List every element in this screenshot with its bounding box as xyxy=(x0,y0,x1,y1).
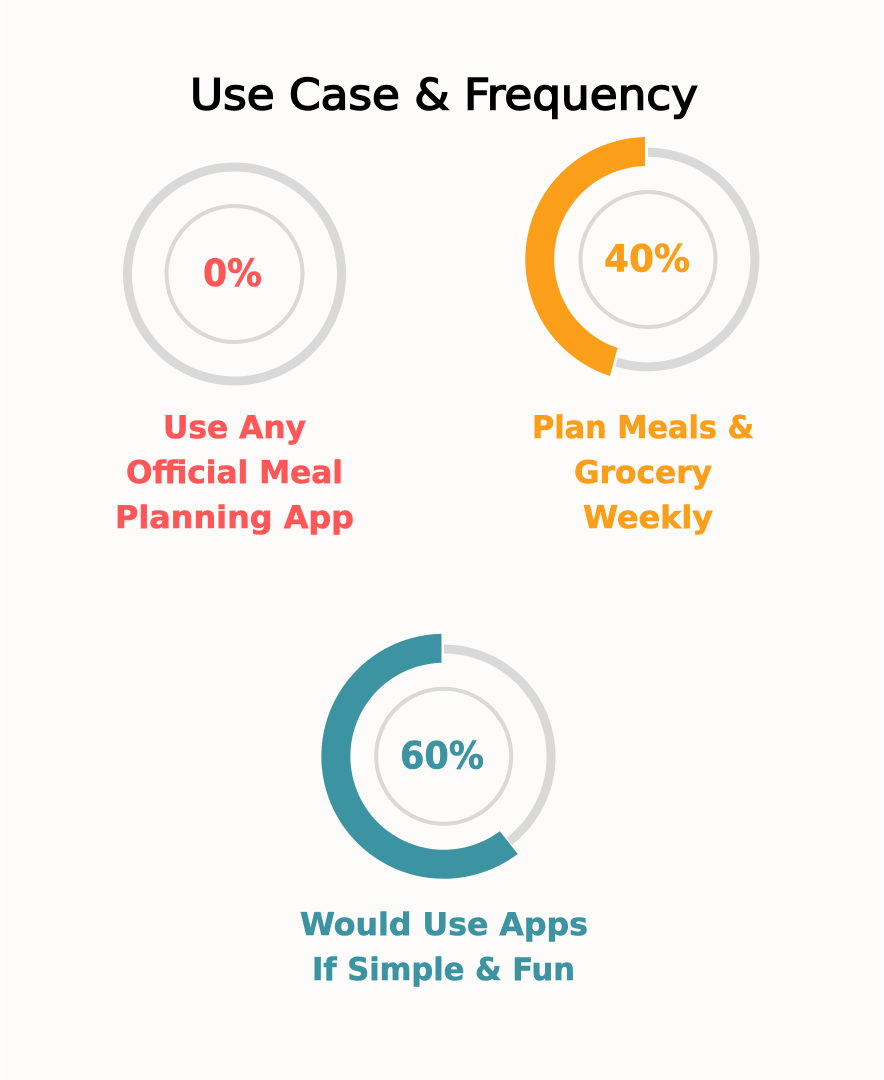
donut chart: 0% xyxy=(128,167,342,381)
label: would use apps if simple and fun: Would Use Apps xyxy=(300,907,588,943)
label: use any official meal planning app: Planning App xyxy=(115,500,354,536)
value: 0%: 0% xyxy=(203,252,262,295)
donut chart: 60% xyxy=(321,634,551,879)
label: use any official meal planning app: Official Meal xyxy=(126,455,343,491)
label: would use apps if simple and fun: If Simple & Fun xyxy=(312,952,575,988)
panel: would use apps if simple and fun, 60% xyxy=(300,634,588,988)
panel: use any official app, 0% xyxy=(115,167,354,536)
label: use any official meal planning app: Use Any xyxy=(163,410,306,446)
label: use any official meal planning app xyxy=(115,410,354,536)
title: Use Case & Frequency xyxy=(190,72,698,120)
label: would use apps if simple and fun xyxy=(300,907,588,988)
value: 60%: 60% xyxy=(400,734,484,778)
value: 40%: 40% xyxy=(604,238,690,280)
label: plan meals and grocery weekly xyxy=(532,410,754,536)
label: plan meals and grocery weekly: Weekly xyxy=(583,500,713,536)
panel: plan meals and grocery weekly, 40% xyxy=(525,137,755,536)
label: plan meals and grocery weekly: Plan Meals & xyxy=(532,410,754,446)
label: plan meals and grocery weekly: Grocery xyxy=(574,455,712,491)
donut chart: 40% xyxy=(525,137,755,376)
